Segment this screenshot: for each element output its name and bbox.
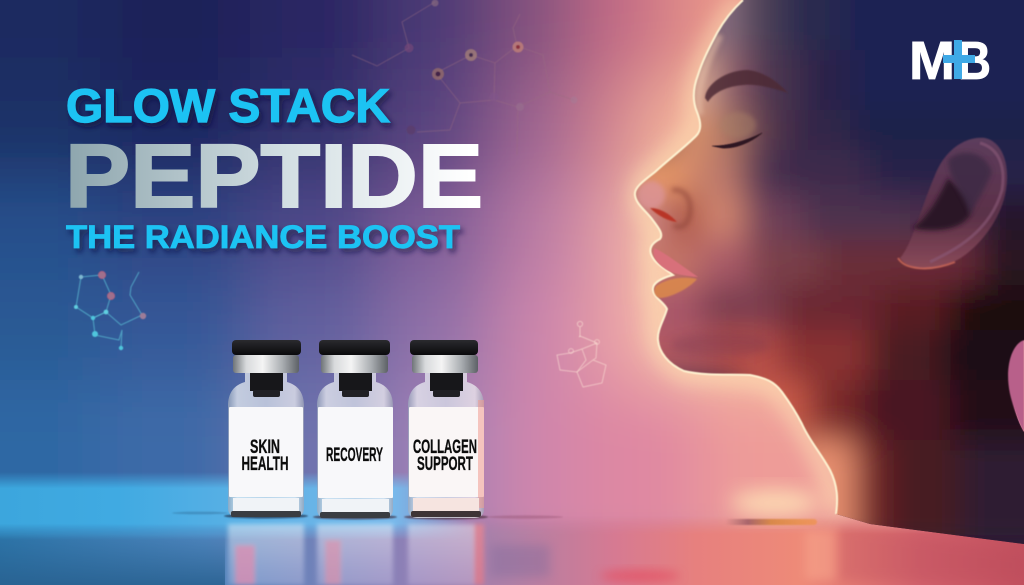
vial: collagen support bbox=[404, 340, 488, 520]
ear bbox=[898, 138, 1007, 269]
eyebrow bbox=[705, 70, 788, 102]
vial: skin health bbox=[224, 340, 308, 518]
woman's face in profile bbox=[620, 0, 1024, 550]
tabletop floor bbox=[0, 470, 1024, 585]
eyelid bbox=[720, 112, 756, 138]
forehead rim bbox=[699, 35, 720, 115]
heading: glow stack: GLOW STACK bbox=[66, 79, 390, 132]
rim light outline bbox=[635, 0, 837, 514]
heading: peptide: PEPTIDE bbox=[65, 127, 483, 227]
upper lip bbox=[653, 248, 698, 277]
logo: M+B bbox=[909, 31, 991, 91]
vial: collagen support: COLLAGEN bbox=[413, 437, 477, 458]
logo: M+B: B bbox=[958, 31, 991, 91]
vial: skin health: SKIN bbox=[250, 437, 280, 458]
background gap behind neck bbox=[1008, 340, 1024, 432]
nose wing bbox=[672, 190, 690, 227]
light glow behind profile bbox=[641, 0, 836, 516]
heading: the radiance boost: THE RADIANCE BOOST bbox=[66, 219, 460, 255]
vial: skin health: HEALTH bbox=[242, 454, 288, 475]
logo: M+B: M bbox=[909, 31, 955, 91]
shoulder / table reflection bbox=[725, 519, 1024, 580]
vial reflections bbox=[228, 524, 484, 585]
molecule: left bbox=[74, 271, 146, 350]
vial: recovery bbox=[313, 340, 397, 520]
lower lip bbox=[654, 278, 697, 298]
molecule: top centre bbox=[352, 0, 578, 155]
skin shading bbox=[620, 0, 1024, 550]
nostril bbox=[650, 208, 677, 222]
vial: recovery: RECOVERY bbox=[326, 445, 383, 466]
vial: collagen support: SUPPORT bbox=[417, 454, 473, 475]
molecule: right bbox=[557, 321, 606, 387]
nose tip bbox=[637, 181, 665, 209]
under jaw shadow bbox=[670, 333, 770, 357]
closed eye lashes bbox=[712, 133, 762, 148]
